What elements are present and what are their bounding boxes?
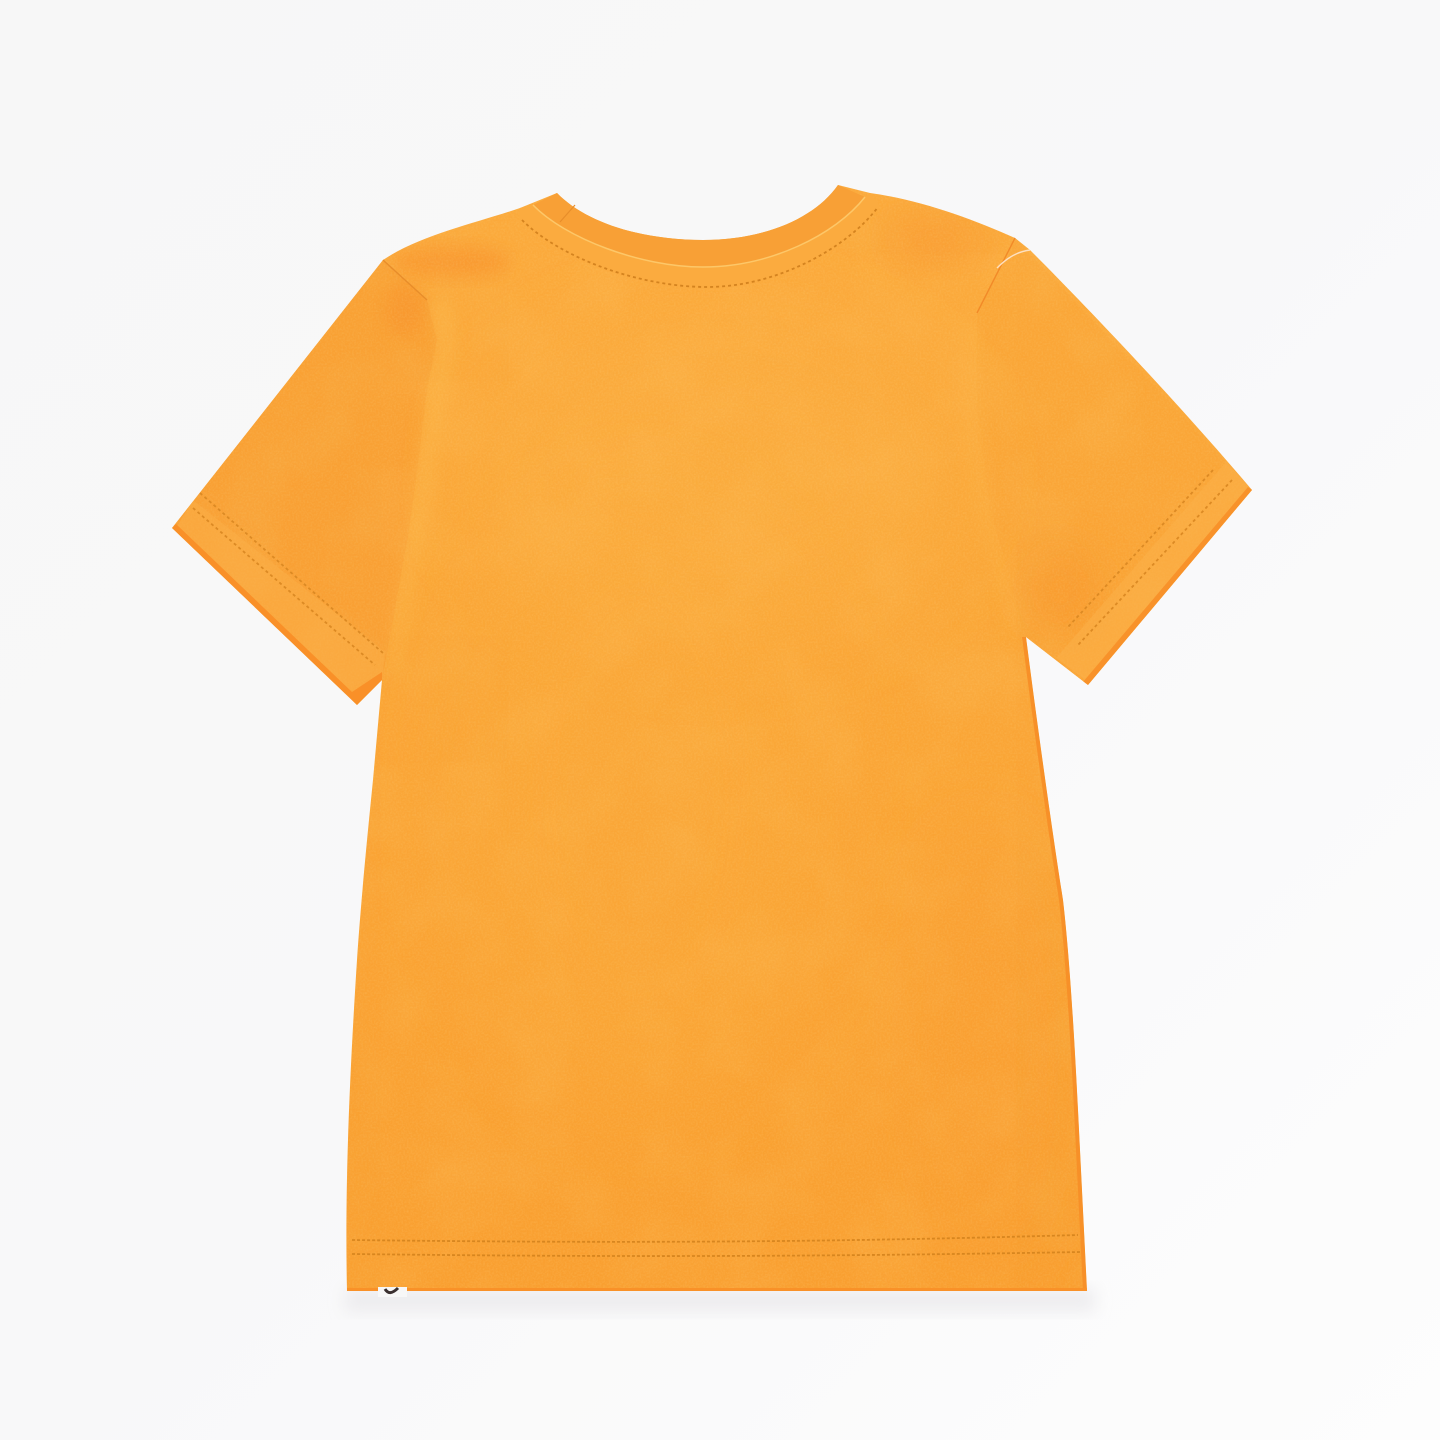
left hem edge (172, 524, 382, 705)
shoulder seams (383, 238, 1030, 313)
right sleeve tone (1016, 238, 1252, 685)
left sleeve hem band (176, 500, 385, 700)
product photo: orange t-shirt on white backdrop (172, 185, 1252, 1308)
right sleeve hem band (1056, 462, 1252, 682)
left sleeve tone (172, 261, 390, 705)
hem side tag (378, 1287, 407, 1297)
rib tag seam (560, 205, 575, 222)
fabric shading (160, 180, 1260, 1300)
collar stitching (522, 207, 878, 287)
body right edge (1022, 637, 1087, 1291)
t-shirt (160, 180, 1260, 1300)
left body highlight (387, 300, 456, 676)
shirt silhouette (172, 185, 1252, 1291)
right hem edge (1083, 487, 1252, 685)
back neck rib (533, 185, 865, 267)
tag logo (385, 1288, 398, 1293)
right body highlight (966, 313, 1026, 637)
fabric mottling (160, 180, 1260, 1300)
bottom hem stitching (352, 1235, 1080, 1256)
left sleeve hem stitching (193, 493, 383, 665)
front collar band (520, 193, 880, 289)
fabric grain (160, 180, 1260, 1300)
collar seam highlight (533, 197, 865, 267)
tag body (378, 1287, 407, 1297)
soft shadow under hem (345, 1288, 1095, 1312)
bottom hem edge (347, 1288, 1087, 1291)
right sleeve hem stitching (1068, 470, 1232, 645)
